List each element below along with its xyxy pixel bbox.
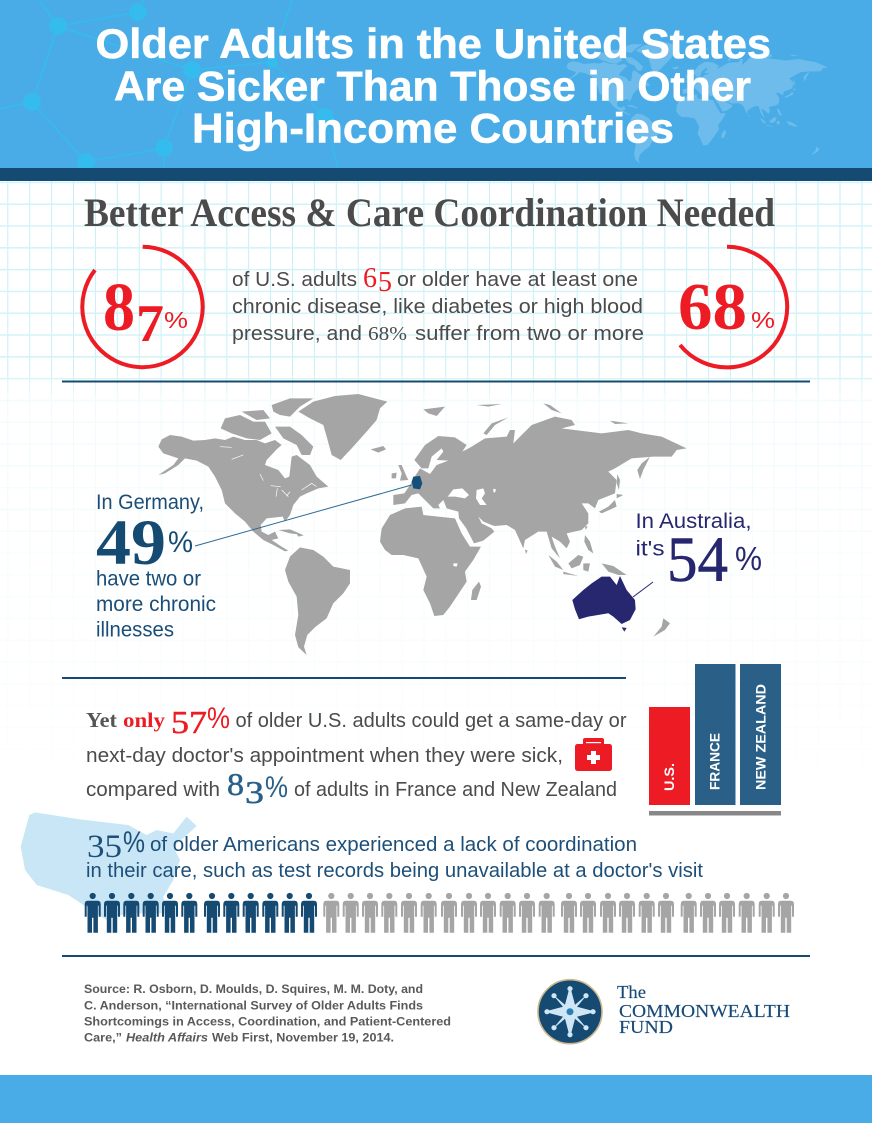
source text: Shortcomings in Access, Coordination, and Patient-Centered: [84, 1016, 451, 1028]
stat description: or older have at least one: [397, 269, 638, 291]
source text: Source: R. Osborn, D. Moulds, D. Squires, M. M. Doty, and: [84, 984, 423, 996]
source text: Web First, November 19, 2014.: [212, 1032, 394, 1044]
access text block: %: [207, 702, 230, 735]
footer band: [0, 1075, 872, 1123]
logo: The Commonwealth Fund: [538, 980, 790, 1044]
stat description: 5: [378, 267, 392, 298]
callout: Australia: it's: [636, 538, 664, 560]
source text: [84, 984, 451, 1044]
coordination text block: of older Americans experienced a lack of coordination: [150, 834, 637, 856]
stat description: 68%: [368, 323, 407, 345]
inland water: [220, 447, 317, 497]
faded world map: [566, 42, 828, 164]
stat description: suffer from two or more: [415, 323, 644, 345]
bar: France: [695, 664, 736, 805]
Germany: [412, 476, 422, 489]
stat: 87 percent ring: 7: [136, 295, 164, 353]
callout: Germany: [96, 485, 412, 642]
access text block: 3: [245, 774, 264, 810]
dark band: [0, 168, 872, 181]
callout: Germany: %: [168, 526, 193, 559]
stat: 68 percent ring: %: [751, 307, 775, 333]
stat: 68 percent ring: [678, 247, 787, 367]
logo wordmark: The: [617, 982, 646, 1002]
stat: 68 percent ring: 68: [678, 270, 747, 344]
coordination text block: %: [123, 826, 145, 859]
US map silhouette: [21, 812, 197, 920]
access text block: 57: [171, 704, 207, 740]
inland seas: [448, 488, 496, 567]
network decoration: [0, 0, 338, 170]
stat description: pressure, and: [232, 323, 362, 345]
callout: Germany: have two or: [96, 568, 201, 590]
access text block: 8: [227, 766, 244, 802]
source text: Care,”: [84, 1032, 122, 1044]
title: High-Income Countries: [192, 104, 674, 152]
access text block: Yet: [86, 708, 117, 732]
source text: C. Anderson, “International Survey of Older Adults Finds: [84, 1000, 423, 1012]
callout: Germany: 49: [96, 507, 166, 579]
access text block: [86, 702, 627, 810]
coordination text block: [86, 826, 703, 882]
bar: New Zealand: [740, 664, 781, 805]
Australia: [572, 576, 636, 632]
pictogram: 12 of 36 people highlighted: [85, 893, 794, 933]
stat description: of U.S. adults: [232, 269, 357, 291]
callout: Germany: more chronic: [96, 593, 216, 616]
stat: 87 percent ring: %: [164, 307, 188, 333]
logo wordmark: FUND: [619, 1017, 673, 1037]
callout: Australia: [633, 510, 762, 597]
callout: Germany: In Germany,: [96, 491, 204, 514]
title: [96, 20, 771, 152]
bar: New Zealand: NEW ZEALAND: [752, 684, 768, 790]
stat: 87 percent ring: 8: [103, 269, 135, 345]
access text block: compared with: [86, 779, 220, 801]
coordination text block: in their care, such as test records being unavailable at a doctor's visit: [86, 860, 703, 882]
logo emblem: [538, 980, 602, 1044]
stat description: 6: [363, 263, 377, 294]
access text block: %: [265, 771, 288, 804]
bar chart: [649, 664, 781, 816]
coordination text block: 35: [87, 829, 122, 865]
logo wordmark: COMMONWEALTH: [619, 1001, 790, 1021]
title: Older Adults in the United States: [96, 20, 771, 67]
chart baseline: [649, 811, 781, 816]
stat description: [232, 263, 644, 345]
source text: Health Affairs: [126, 1032, 208, 1044]
bar: U.S.: [649, 707, 690, 805]
background grid: [0, 181, 872, 851]
header banner: [0, 0, 872, 181]
access text block: next-day doctor's appointment when they were sick,: [86, 745, 563, 767]
access text block: of older U.S. adults could get a same-day or: [236, 710, 627, 732]
stat: 87 percent ring: [82, 247, 203, 367]
title: Are Sicker Than Those in Other: [114, 62, 751, 110]
logo wordmark: [617, 982, 790, 1037]
bar: France: FRANCE: [706, 733, 722, 790]
callout: Australia: In Australia,: [636, 510, 752, 533]
callout: Australia: %: [735, 540, 762, 577]
icon: medical kit: [575, 738, 612, 771]
stat description: chronic disease, like diabetes or high blood: [232, 296, 643, 318]
access text block: only: [123, 708, 166, 732]
world map: [158, 394, 687, 655]
callout: Australia: 54: [667, 524, 728, 596]
access text block: of adults in France and New Zealand: [294, 779, 617, 801]
bar: U.S.: U.S.: [661, 763, 677, 791]
heading: Better Access & Care Coordination Needed: [84, 190, 775, 235]
callout: Germany: illnesses: [96, 618, 174, 642]
